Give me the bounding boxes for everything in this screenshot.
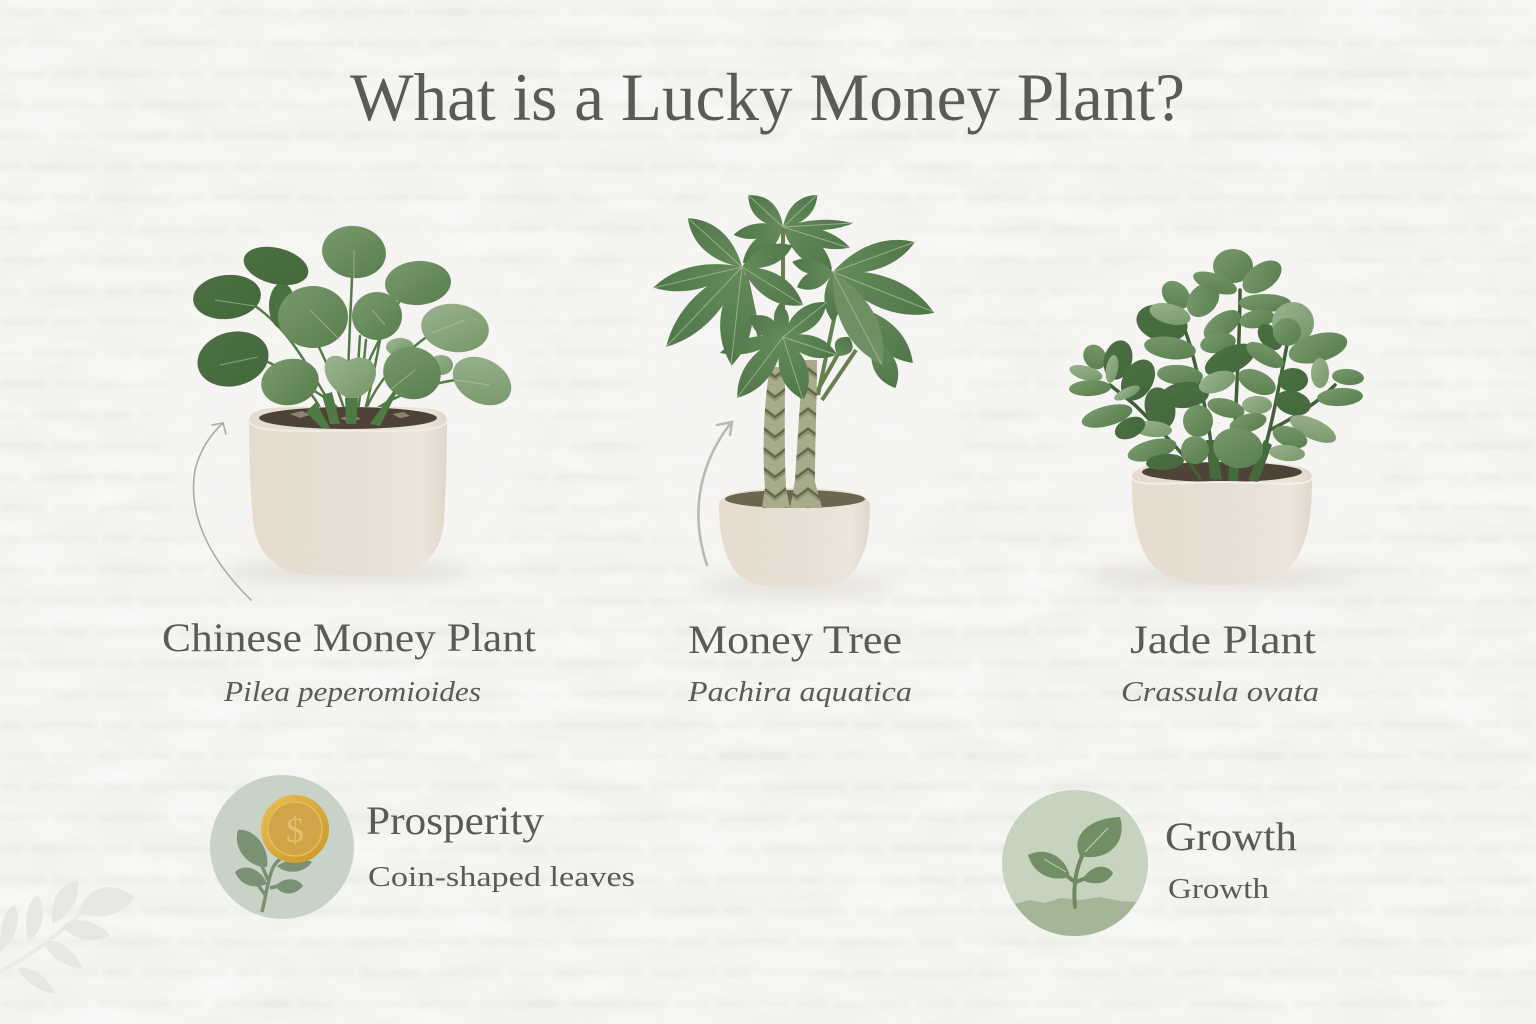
pot speckle [249, 407, 447, 575]
arrow: Money Tree [698, 422, 732, 565]
pot rim shading [249, 421, 447, 431]
text: Prosperity: Coin-shaped leaves [368, 862, 635, 893]
pot soil [1142, 462, 1302, 482]
text: Growth: Growth [1168, 874, 1269, 905]
pot rim [1132, 478, 1312, 484]
label: Money Tree: Money Tree [688, 617, 902, 662]
label: Chinese Money Plant: Chinese Money Plant [162, 615, 536, 660]
pot [1132, 462, 1312, 585]
label: Money Tree: Pachira aquatica [687, 677, 912, 708]
pot soil [725, 490, 865, 508]
stems [1110, 290, 1335, 480]
label: Money Tree [687, 617, 912, 708]
label: Jade Plant: Jade Plant [1130, 617, 1316, 662]
icon: prosperity coin sprout [210, 775, 354, 919]
pot shadow [1085, 569, 1355, 587]
behind leaves [737, 218, 922, 393]
text: Prosperity: Prosperity [366, 798, 544, 843]
pot shadow [225, 563, 475, 581]
icon: prosperity coin sprout: $ [286, 810, 304, 850]
label: Jade Plant [1121, 617, 1319, 708]
pot soil [259, 407, 437, 429]
fleshy leaves [1068, 249, 1365, 472]
title: What is a Lucky Money Plant? [350, 59, 1185, 135]
arrow: Chinese Money Plant [193, 423, 251, 600]
label: Chinese Money Plant: Pilea peperomioides [223, 677, 481, 708]
pot speckle [719, 488, 870, 588]
plant: Jade Plant illustration [1068, 249, 1365, 587]
plant: Chinese Money Plant illustration [191, 222, 520, 600]
text: Growth: Growth [1165, 814, 1297, 859]
plant: Money Tree illustration [651, 188, 940, 594]
braided trunks [762, 367, 790, 508]
icon: growth sprout [1002, 790, 1148, 936]
base shoots [306, 390, 396, 428]
decorative faint leaf sprig, bottom left [0, 880, 135, 994]
pot [249, 407, 447, 575]
leaf midribs [653, 195, 934, 400]
text: Prosperity [366, 798, 635, 893]
pot shadow [695, 578, 895, 594]
pot [719, 488, 870, 588]
pot speckle [1132, 462, 1312, 585]
label: Jade Plant: Crassula ovata [1121, 677, 1319, 708]
stems [746, 227, 856, 400]
petioles [255, 278, 455, 412]
round leaves [191, 222, 520, 415]
leaf veins [215, 250, 490, 390]
leaves [651, 188, 940, 405]
thick base stems [1206, 440, 1272, 482]
text: Growth [1165, 814, 1297, 905]
label: Chinese Money Plant [162, 615, 536, 708]
